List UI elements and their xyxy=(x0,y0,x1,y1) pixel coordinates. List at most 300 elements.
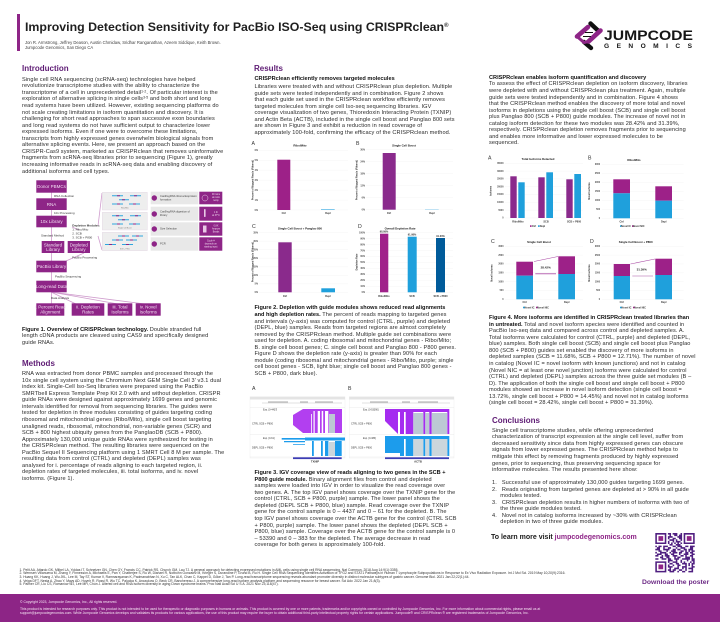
callout: time xyxy=(199,192,222,204)
step: digestion formation: formation xyxy=(160,197,172,201)
text: conclusions: decreased sensitivity since data from highly expressed genes can obscure xyxy=(492,441,683,447)
list: conclusions: the three guide modules tested. xyxy=(500,506,582,512)
box: PacBio Library xyxy=(36,261,67,272)
chart D: single cell boost + P800 novel isoforms: 1500 xyxy=(595,272,601,274)
chart C: single cell boost + panglao 800: 25% xyxy=(253,249,258,251)
caption: figure 4: 13.72%, single cell boost + P800 = 14.45%) and novel not in catalog isoforms xyxy=(489,394,688,400)
caption: figure 4: (single cell boost = 28.42%, single cell boost + P800 = 31.39%). xyxy=(489,400,654,406)
chart B: ribo/mito novel isoforms: 500 xyxy=(596,209,601,211)
text: methods: depletion rates of targeted molecules, iii. total isoforms, and iv. novel xyxy=(22,469,198,475)
IGV panel B: ACTB: Exp. [0-53390] xyxy=(363,408,379,412)
logo xyxy=(574,21,693,50)
caption: figure 2: Figure 2. Depletion with guide modules shows reduced read alignments xyxy=(254,305,445,311)
caption: figure 2: SCB + P800, dark blue). xyxy=(254,371,317,377)
text: introduction: Single cell RNA sequencing (scRNA-seq) technologies have helped xyxy=(22,77,196,83)
IGV panel A: TXNIP xyxy=(250,386,345,463)
caption: figure 4: modules showed an increase in novel isoform detection (single cell boost = xyxy=(489,387,682,393)
text: isoform quantification: plus Panglao 800 (SCB + P800) guide modules. The increase of novel not in xyxy=(489,114,685,120)
text: introduction: additional isoforms and cell types. xyxy=(22,169,109,175)
chart D: overall depletion rate: 91.33% xyxy=(436,235,446,238)
caption: figure 3: top IGV panel shows coverage over the ACTB gene for the control (CTRL SCB xyxy=(254,516,457,522)
text: introduction: challenging for short read approaches to span successive exon boundaries xyxy=(22,116,215,122)
IGV panel B: ACTB: CTRL SCB + P800 xyxy=(351,422,373,426)
text: isoform quantification: catalog isoform detection for these two modules was 28.42% and 31.39%, xyxy=(489,121,679,127)
text: conclusions: informative molecules. The results presented here show: xyxy=(492,467,638,473)
text: introduction: expressed isoforms. Even if one were to overcome these limitations, xyxy=(22,129,198,135)
chart B: ribo/mito novel isoforms: Novel IC xyxy=(621,225,631,228)
step labels: PacBio Sequencing xyxy=(55,274,82,278)
chart D: single cell boost + P800 novel isoforms: 1000 xyxy=(595,281,601,283)
caption: figure 2 xyxy=(254,305,456,377)
chart D: overall depletion rate: Overall Depletion Rate xyxy=(385,227,416,231)
text: methods: SCB + 800 highest ubiquity genes from the PanglaoDB (SCB + P800). xyxy=(22,430,203,436)
text: introduction: increasing informative reads in scRNA-seq data and enabling discovery of xyxy=(22,162,212,168)
box: Novel Isoforms: iv. Novel xyxy=(140,305,157,310)
box: RNA: RNA xyxy=(47,202,56,207)
text: methods: unaligned reads, ribosomal, mitochondrial, non-variable genes (SCR) and xyxy=(22,424,211,430)
caption: figure 2: (DEPL, blue) samples. Reads from targeted regions are almost completely xyxy=(254,325,446,331)
download label: Download the poster xyxy=(642,579,709,586)
list: conclusions: 1. Successful use of approximately 130,000 guides targeting 1699 genes. xyxy=(492,480,684,486)
chart A: total isoforms detected: A xyxy=(488,156,492,162)
list: conclusions: 4. Novel not in catalog isoforms increased by ~30% with CRISPRclean xyxy=(492,513,677,519)
figure 4: isoform charts xyxy=(488,156,672,309)
panel: guide schematic ribo/mito: Ribo/Mito xyxy=(121,207,129,210)
callout: beads: Ampure xyxy=(212,228,221,231)
caption: figure 3: Figure 3. IGV coverage view of reads aligning to two genes in the SCB + xyxy=(254,470,446,476)
text: results: coverage visualization of two genes, Thioredoxin Interacting Protein (TXNIP) xyxy=(254,110,451,116)
chart C: single cell boost + panglao 800: 20% xyxy=(253,258,258,260)
caption: figure 3 xyxy=(254,470,457,548)
chart C: single cell boost novel isoforms: Ctrl xyxy=(523,301,527,304)
chart A: ribo/mito: Percent of Mapped Reads (Filtered) xyxy=(252,160,254,200)
chart A: ribo/mito: 1% xyxy=(255,200,258,202)
text: isoform quantification: and enables more informative and lower expressed molecules to be xyxy=(489,134,663,140)
title: Improving Detection Sensitivity for PacBio ISO-Seq using CRISPRclean® xyxy=(25,20,449,34)
chart B: ribo/mito novel isoforms: Ribo/Mito xyxy=(627,158,641,162)
depletion modules list: 3. SCB + P800 xyxy=(72,236,93,240)
chart A: ribo/mito: 3% xyxy=(255,180,258,182)
callout: PCR cycles: depends on xyxy=(205,243,218,245)
chart C: single cell boost + panglao 800: 15% xyxy=(253,266,258,268)
chart C: single cell boost + panglao 800: Percent of Mapped Reads (Filtered) xyxy=(252,242,254,282)
heading: results: Results xyxy=(254,64,283,73)
chart C: single cell boost novel isoforms: 500 xyxy=(500,290,504,292)
text: conclusions: Single cell transcriptome studies, while offering unprecedented xyxy=(492,428,653,434)
IGV panel B: ACTB: ACTB xyxy=(414,459,422,463)
chart B: single cell boost: 24% xyxy=(360,160,365,163)
chart D: overall depletion rate: D xyxy=(358,224,362,230)
text: results: are shown in Figure 3 and exhibit a reduction in read coverage of xyxy=(254,123,422,129)
text: results xyxy=(254,84,455,136)
text: introduction: transcripts from highly expressed genes overwhelm biological signals from xyxy=(22,136,213,142)
chart D: overall depletion rate: 90% xyxy=(360,238,365,240)
IGV panel A: TXNIP: A xyxy=(252,386,256,392)
chart D: overall depletion rate: 91.98% xyxy=(408,234,417,236)
chart D: overall depletion rate: SCB xyxy=(409,295,415,298)
chart A: total isoforms detected: 30000 xyxy=(497,171,504,173)
chart A: ribo/mito: 0% xyxy=(255,210,258,212)
caption: figure 1: length cDNA products are cleaved using CAS9 and specifically designed xyxy=(22,333,208,339)
chart D: overall depletion rate: 100% xyxy=(359,232,365,234)
chart A: total isoforms detected: 20000 xyxy=(497,186,504,188)
IGV panel B: ACTB: B xyxy=(348,386,352,392)
text: isoform quantification xyxy=(489,81,688,146)
caption: figure 1 xyxy=(22,327,208,346)
subheading: isoform quantification: CRISPRclean enables isoform quantification and discovery xyxy=(489,75,646,81)
chart A: total isoforms detected: 25000 xyxy=(497,179,504,181)
text: methods xyxy=(22,371,224,482)
text: isoform quantification: respectively. CRISPRclean depletion removes fragments prior to sequencing xyxy=(489,127,686,133)
step: digestion: library xyxy=(160,213,168,217)
box: Donor PBMCs xyxy=(36,180,67,193)
chart A: ribo/mito xyxy=(252,141,348,215)
text: methods: intervals identified for removal from sequencing libraries. The guides were xyxy=(22,404,212,410)
caption: figure 2: used for depletion. A. coding ribosomal and mitochondrial genes - Ribo/Mito; xyxy=(254,338,451,344)
box: Depleted Library xyxy=(68,241,90,253)
references: 3. Huang KK, Huang J, Wu JKL, Lee M, Tay ST, Kumar V, Ramnarayanan K, Padmanabhan N, Xu C, Tan ALK, Chan C, Kappei D, Göke J, Tan P. Long-read transcriptome sequencing reveals abundant promoter diversity in distinct molecular subtypes of gastric cancer. Genome Biol. 2021 Jan 22;22(1):44. xyxy=(20,575,469,579)
box: Standard Library: Library xyxy=(46,247,61,252)
box: Total Isoforms: iii. Total xyxy=(113,305,127,310)
chart C: single cell boost + panglao 800: C xyxy=(252,224,256,230)
chart C: single cell boost + panglao 800: Depl xyxy=(325,295,331,298)
chart C: single cell boost + panglao 800: 0% xyxy=(255,292,258,294)
text: isoform quantification: isoforms in depletions using the single cell boost (SCB) and single cell boost xyxy=(489,108,686,114)
call to action: To learn more visit jumpcodegenomics.com xyxy=(491,534,637,541)
chart C: single cell boost novel isoforms xyxy=(490,239,583,309)
caption: figure 4: PacBio Iso-seq data and compared across control and depleted samples. A. xyxy=(489,328,684,334)
chart B: single cell boost: Ctrl xyxy=(387,212,391,215)
chart C: single cell boost + panglao 800: 35% xyxy=(253,232,258,234)
chart B: single cell boost: 30% xyxy=(360,149,365,151)
chart B: ribo/mito novel isoforms: 1000 xyxy=(595,200,601,202)
text: isoform quantification: that the CRISPRclean method enables the discovery of more total and novel xyxy=(489,101,685,107)
chart D: single cell boost + P800 novel isoforms: 2000 xyxy=(595,264,601,266)
chart B: ribo/mito novel isoforms: 0 xyxy=(599,218,601,220)
chart A: total isoforms detected: 15000 xyxy=(497,194,504,196)
legal disclaimer xyxy=(20,607,540,615)
text: conclusions xyxy=(492,428,683,473)
text: methods: resulting data from control (CTRL) and depleted (DEPL) samples was xyxy=(22,456,201,462)
IGV panel B: ACTB: DEPL SCB + P800 xyxy=(351,446,373,450)
chart B: single cell boost: 12% xyxy=(360,185,365,187)
caption: figure 2: module (coding ribosomal and mitochondrial genes - Ribo/Mito, purple; single xyxy=(254,358,454,364)
text: methods: isoforms. (Figure 1). xyxy=(22,476,74,482)
chart B: single cell boost: Single Cell Boost xyxy=(392,144,416,148)
text: methods: Approximately 130,000 unique guide RNAs were synthesized for testing in xyxy=(22,437,213,443)
list: conclusions: modules tested. xyxy=(500,493,541,499)
chart C: single cell boost novel isoforms: 2500 xyxy=(498,255,504,257)
text: introduction: transcriptome of a cell in unprecedented detail1-2. Of particular interest is the xyxy=(22,89,218,96)
callout: temperature: 1 hr xyxy=(214,211,218,214)
text: isoform quantification: To assess the effect of CRISPRclean depletion on isoform discovery, libraries xyxy=(489,81,688,87)
chart A: ribo/mito: Ctrl xyxy=(282,212,286,215)
text: methods: SMRTbell Express Template Prep Kit 2.0 with and without depletion. CRISPR xyxy=(22,391,221,397)
chart B: ribo/mito novel isoforms: Ctrl xyxy=(620,220,624,223)
box: Percent Read Alignment: i. Percent Read xyxy=(35,305,66,310)
caption: figure 4: Total isoforms were calculated for control (CTRL, purple) and depleted (DEPL, xyxy=(489,335,690,341)
callout: beads: Beads xyxy=(213,232,220,234)
callout: time: at room xyxy=(212,196,220,199)
caption: figure 4: in catalog (Novel IC = novel isoform with known junctions) and not in catalog xyxy=(489,361,686,367)
box: Standard Library: Standard xyxy=(44,242,63,247)
chart A: ribo/mito: 6% xyxy=(255,150,258,152)
text: introduction: CRISPR-Cas9 system, marketed as CRISPRclean that removes uninformative xyxy=(22,149,223,155)
chart A: ribo/mito: A xyxy=(252,141,256,147)
text: introduction: revolutionize transcriptome studies with the ability to characterize the xyxy=(22,83,200,89)
chart B: single cell boost: 0% xyxy=(362,209,365,211)
legal disclaimer: support@jumpcodegenomics.com. While Jumpcode Genomics develops and validates its products for various applications, the use of this product may require the buyer to obtain additional third-party intellectual property rights for certain applications. Jumpcode® and CRISPRclean ® are registered trademarks of Jumpcode Genomics, Inc. xyxy=(20,611,529,615)
chart B: ribo/mito novel isoforms: 2500 xyxy=(595,173,601,175)
chart B: single cell boost: Percent of Mapped Reads (Filtered) xyxy=(356,160,358,200)
figure 2: bar charts xyxy=(252,141,448,298)
step labels: 10x Processing xyxy=(54,211,75,215)
step labels: Standard Method xyxy=(41,234,64,238)
step: digestion xyxy=(151,207,198,221)
caption: figure 4: in untreated. Total and novel isoform species were identified and counted in xyxy=(489,322,684,328)
caption: figure 3: two genes. A. The top IGV panel shows coverage over the TXNIP gene for the xyxy=(254,490,455,496)
step: PCR xyxy=(151,237,198,251)
caption: figure 2: and intervals (y-axis) was computed for control (CTRL, purple) and depleted xyxy=(254,319,450,325)
caption: figure 2: cell boost genes - SCB, light blue; single cell boost and Panglao 800 genes - xyxy=(254,364,452,370)
text: isoform quantification: guide sets were tested independently and in combination. Figure 4 shows xyxy=(489,95,678,101)
panel: guide schematic P800 xyxy=(102,232,147,251)
text: methods: tested for depletion in three modules consisting of guides targeting coding xyxy=(22,410,212,416)
box: Standard Library xyxy=(42,241,64,253)
chart A: total isoforms detected: SCB + P800 xyxy=(567,220,582,223)
logo: JUMPCODE xyxy=(604,28,693,43)
chart C: single cell boost novel isoforms: 1000 xyxy=(498,281,504,283)
chart C: single cell boost + panglao 800: Ctrl xyxy=(283,295,287,298)
text: results: approximately 100-fold, confirming the efficacy of the CRISPRclean method. xyxy=(254,130,451,136)
chart D: overall depletion rate: SCB + P800 xyxy=(434,295,448,298)
step: digestion: Cas9/sgRNA digestion of xyxy=(160,210,190,214)
chart B: ribo/mito novel isoforms: 1500 xyxy=(595,191,601,193)
chart A: ribo/mito: 5% xyxy=(255,160,258,162)
panel: guide schematic SCB xyxy=(102,212,147,230)
copyright: © Copyright 2023, Jumpcode Genomics, Inc., All rights reserved. xyxy=(20,600,117,604)
list: conclusions: 3. CRISPRclean depletion results in higher numbers of isoforms with two of xyxy=(492,500,689,506)
step: size selection xyxy=(151,222,198,236)
callout: beads xyxy=(199,222,222,236)
caption: figure 2: removed by the CRISPRclean method. Multiple guide set combinations were xyxy=(254,332,451,338)
chart A: total isoforms detected: 35000 xyxy=(497,163,504,165)
chart A: total isoforms detected: SCB xyxy=(543,220,549,223)
chart B: single cell boost: Depl xyxy=(429,212,435,215)
chart A: total isoforms detected: 0 xyxy=(502,218,504,220)
text: results: and Actin Beta (ACTB), included in the single cell boost and Panglao 800 sets xyxy=(254,117,455,123)
chart D: overall depletion rate: 30% xyxy=(360,274,365,276)
box: Depletion Rates: Rates xyxy=(82,310,95,315)
text: methods: guide RNAs were designed against approximately 1699 genes and genomic xyxy=(22,397,217,403)
chart C: single cell boost novel isoforms: 2000 xyxy=(498,264,504,266)
step: size selection: Size Selection xyxy=(160,226,178,230)
chart D: single cell boost + P800 novel isoforms: D xyxy=(590,239,594,245)
text: results: Libraries were treated with and without CRISPRclean plus depletion. Multiple xyxy=(254,84,452,90)
step labels: Data Analysis xyxy=(51,296,70,300)
text: methods: ribosomal and mitochondrial genes (Ribo/Mito), single cell boost targeting xyxy=(22,417,211,423)
IGV panel B: ACTB: Exp. [0-383] xyxy=(363,437,376,440)
IGV panel A: TXNIP: DEPL SCB + P800 xyxy=(252,446,274,450)
caption: figure 4 xyxy=(489,315,696,406)
caption: figure 1: Figure 1. Overview of CRISPRclean technology. Double stranded full xyxy=(22,327,202,333)
caption: figure 4: (CTRL) and depleted (DEPL) samples across the three guide set modules (B – xyxy=(489,374,691,380)
caption: figure 3: depleted (DEPL SCB + P800, blue) sample. Read coverage over the TXNIP xyxy=(254,503,449,509)
chart D: single cell boost + P800 novel isoforms: Ctrl xyxy=(620,301,624,304)
authors: Jumpcode Genomics, San Diego CA xyxy=(25,45,93,50)
caption: figure 2: B. single cell boost genes; C. single cell boost and Panglao 800 - P800 genes. xyxy=(254,345,456,351)
chart A: total isoforms detected: 5000 xyxy=(498,210,504,212)
callout: temperature: at 37°C xyxy=(212,214,220,217)
chart A: ribo/mito: 4% xyxy=(255,169,258,172)
list: conclusions: 2. Reads originating from targeted genes are depleted at > 90% in all guide xyxy=(492,487,689,493)
panel: guide schematic ribo/mito xyxy=(102,192,147,210)
references: 4. Veiga DFT, Nesta A, Zhao Y, Mays AD, Huynh R, Rossi R, Wu TC, Palucka K, Anczukow O, Beck CR, Banchereau J. A comprehensive long-read isoform analysis platform and sequencing resource for breast cancer. Sci Adv. 2022 Jan 21;8(3). xyxy=(20,579,380,583)
chart B: ribo/mito novel isoforms: Novel NIC xyxy=(633,225,645,228)
step labels xyxy=(41,194,98,300)
IGV panel A: TXNIP: Exp. [0-61] xyxy=(263,437,275,440)
chart B: single cell boost xyxy=(356,141,453,215)
text: methods: 10x single cell system using the Chromium Next GEM Single Cell 3' v3.1 dual xyxy=(22,378,221,384)
callout: time: temp xyxy=(213,199,219,202)
caption: figure 3: gene for the control sample is 0 – 4437 and 0 – 61 for the depleted. B. The xyxy=(254,509,447,515)
chart D: single cell boost + P800 novel isoforms: Single Cell Boost + P800 xyxy=(619,240,653,244)
chart B: ribo/mito novel isoforms xyxy=(588,156,684,228)
text: introduction: fragments from scRNA-seq libraries prior to sequencing (Figure 1), greatly xyxy=(22,155,213,161)
box: Depletion Rates: ii. Depletion xyxy=(76,305,100,310)
box: Long-read Data xyxy=(36,281,68,292)
text: introduction: exploration of alternative splicing in single cells3-5 and both short and long xyxy=(22,96,211,102)
box: Total Isoforms xyxy=(108,303,132,316)
references xyxy=(20,568,566,586)
chart A: ribo/mito: Ribo/Mito xyxy=(293,144,307,148)
chart A: total isoforms detected: Depl xyxy=(540,225,545,228)
chart D: single cell boost + P800 novel isoforms: Novel Isoforms xyxy=(588,264,591,282)
step labels: PacBio Processing xyxy=(72,256,98,260)
box: Novel Isoforms: Isoforms xyxy=(140,310,158,315)
callout: time: 90 mins xyxy=(212,194,221,196)
chart B: ribo/mito novel isoforms: Depl xyxy=(661,220,667,223)
step: digestion formation: Cas9/sgRNA ribonucleoprotein xyxy=(160,194,197,198)
box: Long-read Data: Long-read Data xyxy=(36,284,68,289)
chart D: single cell boost + P800 novel isoforms: Novel NIC xyxy=(634,306,646,309)
text: methods: the CRISPRclean method. The resulting libraries were sequenced on the xyxy=(22,443,209,449)
caption: figure 3: coverage for both genes is approximately 100-fold. xyxy=(254,542,385,548)
text: introduction: not scale creating limitations in isoform quantitation and discovery. It is xyxy=(22,110,204,116)
text: results: guide sets were tested independently and in combination. Figure 2 shows xyxy=(254,91,444,97)
text: methods: PacBio Sequel II Sequencing platform using 1 SMRT Cell 8 M per sample. The xyxy=(22,450,224,456)
caption: figure 4: depleted samples (SCB = 11.68%, SCB + P800 = 12.71%). The number of novel xyxy=(489,354,696,360)
chart D: single cell boost + P800 novel isoforms: 500 xyxy=(596,290,601,292)
caption: figure 4: Figure 4. More isoforms are identified in CRISPRclean treated libraries than xyxy=(489,315,689,321)
caption: figure 4: D). The application of both the single cell boost and single cell boost + P800 xyxy=(489,381,685,387)
caption: figure 1: guide RNAs. xyxy=(22,340,55,346)
text: results: that each guide set used in the CRISPRclean workflow efficiently removes xyxy=(254,97,445,103)
chart C: single cell boost novel isoforms: Novel IC xyxy=(524,306,535,309)
chart C: single cell boost + panglao 800 xyxy=(252,224,348,298)
chart C: single cell boost + panglao 800: Single Cell Boost + Panglao 800 xyxy=(278,227,322,231)
text: methods: index kit. Single-Cell Iso-Seq libraries were prepared using the PacBio xyxy=(22,384,203,390)
step: digestion formation xyxy=(151,192,198,204)
chart B: ribo/mito novel isoforms: B xyxy=(588,156,592,162)
chart D: overall depletion rate: 0% xyxy=(362,292,365,294)
caption: figure 2: Figure D shows the depletion rate (y-axis) is greater than 90% for each xyxy=(254,351,437,357)
IGV panel A: TXNIP: TXNIP xyxy=(311,459,319,463)
step: PCR: PCR xyxy=(160,242,166,246)
chart C: single cell boost novel isoforms: 28.42% xyxy=(541,265,551,269)
chart C: single cell boost novel isoforms: 3000 xyxy=(498,246,504,248)
subheading: results: CRISPRclean efficiently removes targeted molecules xyxy=(254,76,395,82)
depletion modules list xyxy=(72,224,100,240)
chart D: overall depletion rate: 98.86% xyxy=(380,231,389,234)
chart A: total isoforms detected: 10000 xyxy=(497,202,504,204)
panel: guide schematic P800: SCB + P800 xyxy=(120,248,130,250)
box: RNA xyxy=(36,198,67,210)
text: conclusions: genes, prior to sequencing, thus preserving sequencing space for xyxy=(492,460,660,466)
box: Donor PBMCs: Donor PBMCs xyxy=(37,184,67,189)
references: 1. Pelit AA, Attardo GK, Milbel LA, Yoldas IT, Schnetzer GN, Chen GY, Francis CC, Patrick RS, Church GM, Lau TJ. A general approach for detecting expressed mutations in AML cells using single cell RNA sequencing. Nat Commun. 2018 Aug 14;9(1):3355. xyxy=(20,568,398,572)
heading: introduction: Introduction xyxy=(22,64,69,72)
depletion modules list: 2. SCB xyxy=(72,232,82,236)
callout: PCR cycles: starting input xyxy=(204,245,218,248)
callout: temperature xyxy=(199,207,222,221)
authors: Jon R. Armstrong, Jeffrey Deason, Austin Chmidaw, Sridhar Ranganathan, Azeem Siddique, Keith Brown. xyxy=(25,40,221,45)
chart D: single cell boost + P800 novel isoforms: Depl xyxy=(661,301,667,304)
chart B: ribo/mito novel isoforms: 3000 xyxy=(595,164,601,166)
text: isoform quantification: sequenced. xyxy=(489,140,519,146)
chart D: overall depletion rate: 20% xyxy=(360,280,365,282)
chart B: single cell boost: 18% xyxy=(360,173,365,175)
chart A: ribo/mito: 2% xyxy=(255,190,258,192)
panel: guide schematic SCB: Single Cell Boost xyxy=(118,227,132,230)
chart D: overall depletion rate: 40% xyxy=(360,267,365,270)
figure 3: IGV coverage views xyxy=(250,386,454,463)
text: isoform quantification: were depleted with and without CRISPRclean plus treatment. Again, multiple xyxy=(489,88,686,94)
box: Depleted Library: Depleted xyxy=(70,242,88,247)
footer band xyxy=(0,594,720,622)
chart C: single cell boost + panglao 800: 30% xyxy=(253,241,258,243)
list: conclusions xyxy=(492,480,689,525)
chart D: single cell boost + P800 novel isoforms: 2500 xyxy=(595,255,601,257)
caption: figure 3: – 53390 and 0 – 383 for the depleted. The average decrease in read xyxy=(254,536,430,542)
depletion modules list: 1. Ribo/Mito xyxy=(72,228,89,232)
caption: figure 3: P800 guide module. Binary alignment files from control and depleted xyxy=(254,477,432,483)
chart D: overall depletion rate: 50% xyxy=(360,262,365,264)
chart B: single cell boost: B xyxy=(356,141,360,147)
chart D: single cell boost + P800 novel isoforms: 3000 xyxy=(595,246,601,248)
chart A: ribo/mito: Depl xyxy=(325,212,331,215)
caption: figure 4: 800 (SCB + P800) guides set enabled the discovery of more isoforms in xyxy=(489,348,674,354)
list: conclusions: depletion in two of three guide modules. xyxy=(500,519,603,525)
chart C: single cell boost novel isoforms: Novel NIC xyxy=(537,306,549,309)
step labels: RNA Collection xyxy=(54,194,75,198)
box: PacBio Library: PacBio Library xyxy=(37,264,67,269)
heading: methods: Methods xyxy=(22,359,55,368)
text: conclusions: signals from lower expressed genes. The CRISPRclean method helps to xyxy=(492,447,678,453)
chart D: single cell boost + P800 novel isoforms: 0 xyxy=(599,299,601,301)
callout: beads: 0.8X xyxy=(214,226,219,228)
caption: figure 3: control (CTRL, SCB + P800, purple) sample. The lower panel shows the xyxy=(254,496,440,502)
chart A: total isoforms detected: Ctrl xyxy=(532,225,536,228)
text: introduction: and long read systems do not have sufficient output to characterize lower xyxy=(22,123,210,129)
caption: figure 2: and high depletion rates. The percent of reads mapping to targeted genes xyxy=(254,312,447,318)
accent bar xyxy=(17,14,20,51)
chart C: single cell boost novel isoforms: Novel Isoforms xyxy=(490,264,494,282)
figure 1: workflow diagram xyxy=(35,180,222,316)
text: introduction: read systems have been utilized. However, existing sequencing platforms do xyxy=(22,103,219,109)
chart C: single cell boost novel isoforms: Depl xyxy=(564,301,570,304)
caption: figure 4: blue) samples. Both single cell boost (SCB) and single cell boost plus Panglao xyxy=(489,341,691,347)
